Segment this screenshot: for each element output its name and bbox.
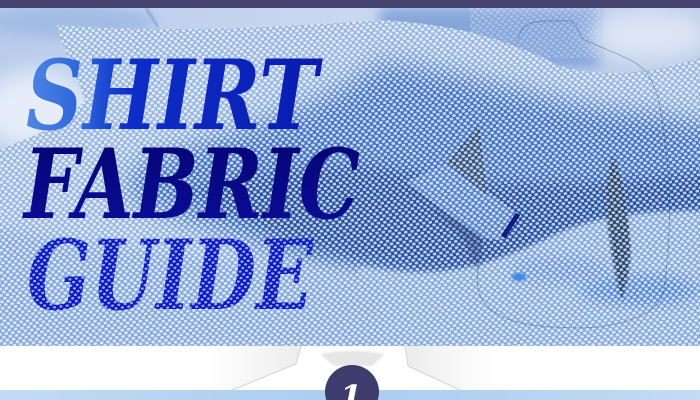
shirt collar triangle xyxy=(447,126,486,194)
dark blue fold xyxy=(190,166,700,276)
light blue band xyxy=(0,390,700,400)
shirt side shadow xyxy=(607,155,631,300)
title line: FABRIC: FABRIC xyxy=(22,128,360,241)
title line: SHIRT: HIRT xyxy=(116,39,323,152)
blurred background cloth xyxy=(0,8,700,150)
sleeve shadow xyxy=(406,182,482,270)
blue spot on fabric xyxy=(512,273,526,281)
title line: SHIRT xyxy=(27,58,323,130)
upper fold of woven fabric xyxy=(0,20,700,224)
sleeve cuff xyxy=(503,214,518,237)
shirt outline xyxy=(477,21,670,328)
title line: SHIRT: SHIRT xyxy=(26,39,323,152)
title xyxy=(22,58,360,310)
title line: GUIDE xyxy=(29,238,314,310)
title line: GUIDE: GUIDE xyxy=(27,219,314,332)
title line: GUIDE: GUIDE xyxy=(27,219,314,332)
white shirt collar strip xyxy=(0,346,700,390)
medium blue fold xyxy=(130,62,700,290)
shirt sleeve xyxy=(406,163,520,240)
top bar xyxy=(0,0,700,8)
number badge xyxy=(325,365,379,400)
lower fold of fabric xyxy=(340,211,700,346)
